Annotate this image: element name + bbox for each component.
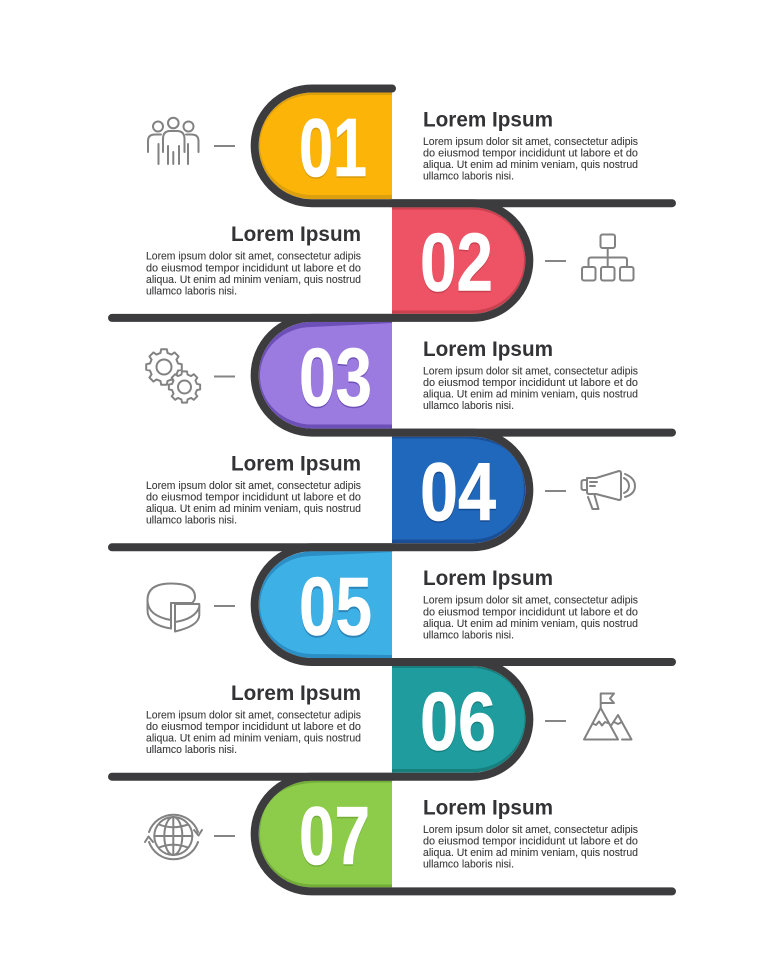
step 03 (146, 318, 672, 433)
step 04 text: ullamco laboris nisi. (146, 515, 237, 527)
step 01 badge: 01 (299, 102, 367, 196)
icon: gears (146, 349, 200, 403)
step 06 (112, 662, 632, 777)
step 04 text: Lorem ipsum dolor sit amet, consectetur adipis (146, 480, 362, 492)
connector dash (545, 260, 566, 262)
step 04 (112, 433, 635, 547)
step 05 badge (255, 547, 672, 662)
step 03 text: do eiusmod tempor incididunt ut labore et do (423, 377, 638, 389)
step 07 text: do eiusmod tempor incididunt ut labore et do (423, 836, 638, 848)
step 03 text: Lorem Ipsum (423, 337, 553, 361)
step 02 (112, 203, 634, 318)
step 05 text: ullamco laboris nisi. (423, 629, 514, 641)
step 02 text: Lorem ipsum dolor sit amet, consectetur adipis (146, 251, 362, 263)
step 03 badge: 03 (299, 330, 372, 423)
step 07 badge: 07 (299, 789, 370, 882)
step 01 text: Lorem ipsum dolor sit amet, consectetur adipis (423, 136, 639, 148)
step 04 text: do eiusmod tempor incididunt ut labore et do (146, 492, 361, 504)
step 07 text: Lorem Ipsum (423, 796, 553, 820)
connector dash (545, 490, 566, 492)
connector dash (545, 720, 566, 722)
step 03 text: ullamco laboris nisi. (423, 400, 514, 412)
step 04 badge: 04 (420, 445, 496, 538)
icon: people (148, 118, 198, 164)
step 02 text: aliqua. Ut enim ad minim veniam, quis nostrud (146, 274, 361, 286)
step 07 text: Lorem ipsum dolor sit amet, consectetur adipis (423, 824, 639, 836)
step 01 text: Lorem Ipsum (423, 108, 553, 132)
connector dash (214, 145, 235, 147)
step 07 (145, 777, 672, 891)
step 01 text: do eiusmod tempor incididunt ut labore et do (423, 148, 638, 160)
step 04 badge (112, 433, 529, 547)
connector dash (214, 376, 235, 378)
icon: megaphone (582, 471, 635, 509)
step 06 badge: 06 (420, 676, 496, 769)
step 05 (148, 547, 672, 662)
step 04 text (146, 452, 362, 527)
step 05 badge: 05 (299, 560, 372, 653)
icon: mountain flag (584, 694, 632, 740)
step 01 badge: 01 (299, 101, 367, 194)
icon: globe with arrows (145, 815, 202, 859)
step 03 badge (255, 318, 672, 433)
step 07 badge: 07 (299, 791, 370, 884)
step 02 text: ullamco laboris nisi. (146, 285, 237, 297)
step 02 text (146, 222, 362, 297)
step 02 badge: 02 (420, 217, 493, 310)
step 03 text: aliqua. Ut enim ad minim veniam, quis nostrud (423, 388, 638, 400)
step 02 text: do eiusmod tempor incididunt ut labore et do (146, 262, 361, 274)
step 03 badge: 03 (299, 332, 372, 425)
step 07 text: aliqua. Ut enim ad minim veniam, quis nostrud (423, 847, 638, 859)
step 06 text: Lorem ipsum dolor sit amet, consectetur adipis (146, 709, 362, 721)
step 01 text (423, 108, 639, 183)
step 02 badge (112, 203, 529, 318)
step 01 text: ullamco laboris nisi. (423, 171, 514, 183)
connector dash (214, 605, 235, 607)
step 05 badge: 05 (299, 561, 372, 654)
step 03 text: Lorem ipsum dolor sit amet, consectetur adipis (423, 365, 639, 377)
step 05 text: do eiusmod tempor incididunt ut labore et do (423, 606, 638, 618)
step 06 text (146, 681, 362, 756)
connector dash (214, 835, 235, 837)
step 06 badge: 06 (420, 674, 496, 767)
step 06 text: aliqua. Ut enim ad minim veniam, quis nostrud (146, 732, 361, 744)
step 05 text: aliqua. Ut enim ad minim veniam, quis nostrud (423, 618, 638, 630)
step 07 text (423, 796, 639, 871)
step 05 text: Lorem Ipsum (423, 566, 553, 590)
step 04 badge: 04 (420, 447, 496, 540)
step 04 text: Lorem Ipsum (231, 452, 361, 476)
step 01 badge (255, 88, 672, 203)
step 01 text: aliqua. Ut enim ad minim veniam, quis nostrud (423, 159, 638, 171)
step 05 text (423, 566, 639, 641)
step 07 text: ullamco laboris nisi. (423, 859, 514, 871)
step 06 text: Lorem Ipsum (231, 681, 361, 705)
icon: org chart (582, 234, 634, 280)
icon: pie chart (148, 584, 199, 632)
step 01 (148, 88, 672, 203)
step 06 text: ullamco laboris nisi. (146, 744, 237, 756)
step 03 text (423, 337, 639, 412)
step 02 badge: 02 (420, 216, 493, 309)
step 06 text: do eiusmod tempor incididunt ut labore et do (146, 721, 361, 733)
step 07 badge (255, 777, 672, 891)
step 02 text: Lorem Ipsum (231, 222, 361, 246)
step 05 text: Lorem ipsum dolor sit amet, consectetur adipis (423, 595, 639, 607)
step 06 badge (112, 662, 529, 777)
step 04 text: aliqua. Ut enim ad minim veniam, quis nostrud (146, 503, 361, 515)
